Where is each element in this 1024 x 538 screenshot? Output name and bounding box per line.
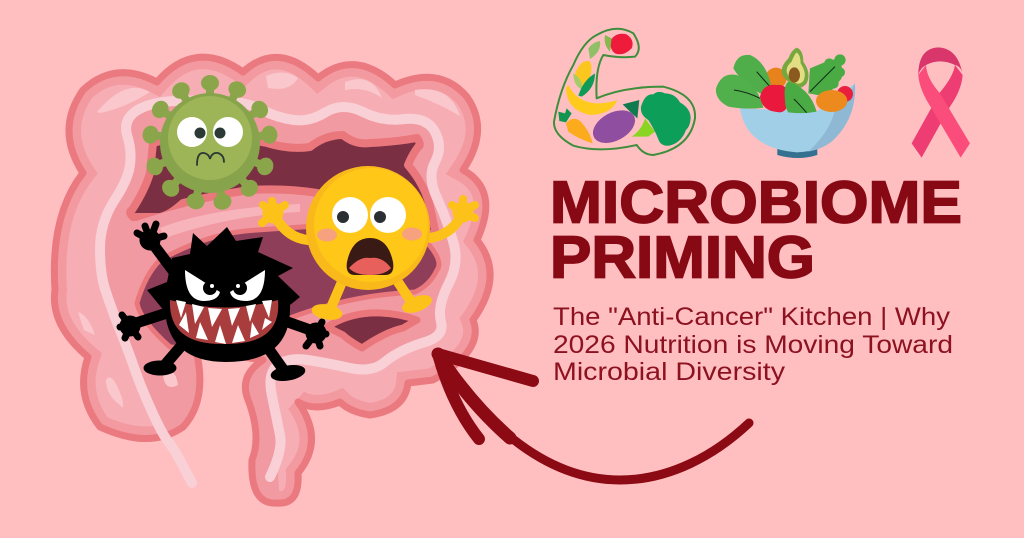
subtitle xyxy=(553,303,953,386)
broccoli xyxy=(641,92,691,146)
carrot xyxy=(566,119,593,143)
bowl xyxy=(740,83,855,152)
monster eyes xyxy=(185,270,265,301)
icon: muscle arm made of vegetables xyxy=(554,29,695,155)
subtitle line 2: 2026 Nutrition is Moving Toward xyxy=(553,331,953,359)
middle fold xyxy=(128,194,325,265)
title line 2: PRIMING xyxy=(550,224,815,290)
virus mouth xyxy=(197,153,224,165)
subtitle line 3: Microbial Diversity xyxy=(553,358,786,386)
subtitle line 1: The "Anti-Cancer" Kitchen | Why xyxy=(553,303,951,331)
bowl foot xyxy=(777,148,817,158)
colon highlights xyxy=(78,72,460,407)
virus body xyxy=(160,93,260,193)
eggplant xyxy=(587,104,641,150)
ribbon back strand xyxy=(912,65,963,158)
arrow barb lower xyxy=(438,354,479,439)
icon: salad bowl xyxy=(716,48,855,158)
arrow shaft thick section xyxy=(438,354,510,438)
mucosal stripe xyxy=(100,100,456,483)
character: green virus xyxy=(141,75,279,211)
yellow limbs xyxy=(276,218,460,310)
lower pouch xyxy=(327,313,417,348)
apple xyxy=(760,85,788,112)
illustration: large intestine xyxy=(54,57,490,503)
arrow pointing at intestine xyxy=(438,354,749,480)
character: black monster xyxy=(120,224,326,383)
colon shaded bands xyxy=(54,57,490,503)
broccoli stem xyxy=(632,118,655,137)
monster toothy mouth xyxy=(170,300,278,344)
monster limbs xyxy=(130,240,316,372)
yellow open mouth xyxy=(347,238,393,275)
character: yellow scared face xyxy=(262,166,475,321)
colon outer wall xyxy=(54,57,490,503)
arm outline xyxy=(554,29,695,155)
virus eyes xyxy=(177,117,243,147)
corn xyxy=(575,61,591,90)
ribbon front strand xyxy=(918,65,970,158)
spinach leaves xyxy=(733,55,772,95)
colon outline xyxy=(54,57,490,503)
strawberry xyxy=(610,34,633,54)
arrow shaft xyxy=(438,354,749,480)
yellow eyes xyxy=(332,197,406,233)
orange back xyxy=(765,68,787,89)
arrow barb upper xyxy=(438,354,533,381)
yellow body xyxy=(306,166,430,290)
icon: pink awareness ribbon xyxy=(912,47,970,158)
title xyxy=(550,170,962,290)
upper lumen xyxy=(130,135,436,235)
yellow cheeks xyxy=(317,228,337,242)
ribbon top xyxy=(918,47,963,75)
kale leaf xyxy=(808,54,846,97)
monster hands and feet xyxy=(120,224,326,383)
lower lumen xyxy=(137,225,439,350)
avocado xyxy=(782,48,809,88)
title line 1: MICROBIOME xyxy=(550,170,962,236)
monster body with spikes xyxy=(147,227,300,362)
virus spikes xyxy=(141,75,279,211)
orange front xyxy=(816,90,847,112)
front spinach leaf xyxy=(785,82,817,113)
red apple side xyxy=(837,86,853,102)
yellow hands and feet xyxy=(262,199,475,321)
banana xyxy=(566,85,617,115)
